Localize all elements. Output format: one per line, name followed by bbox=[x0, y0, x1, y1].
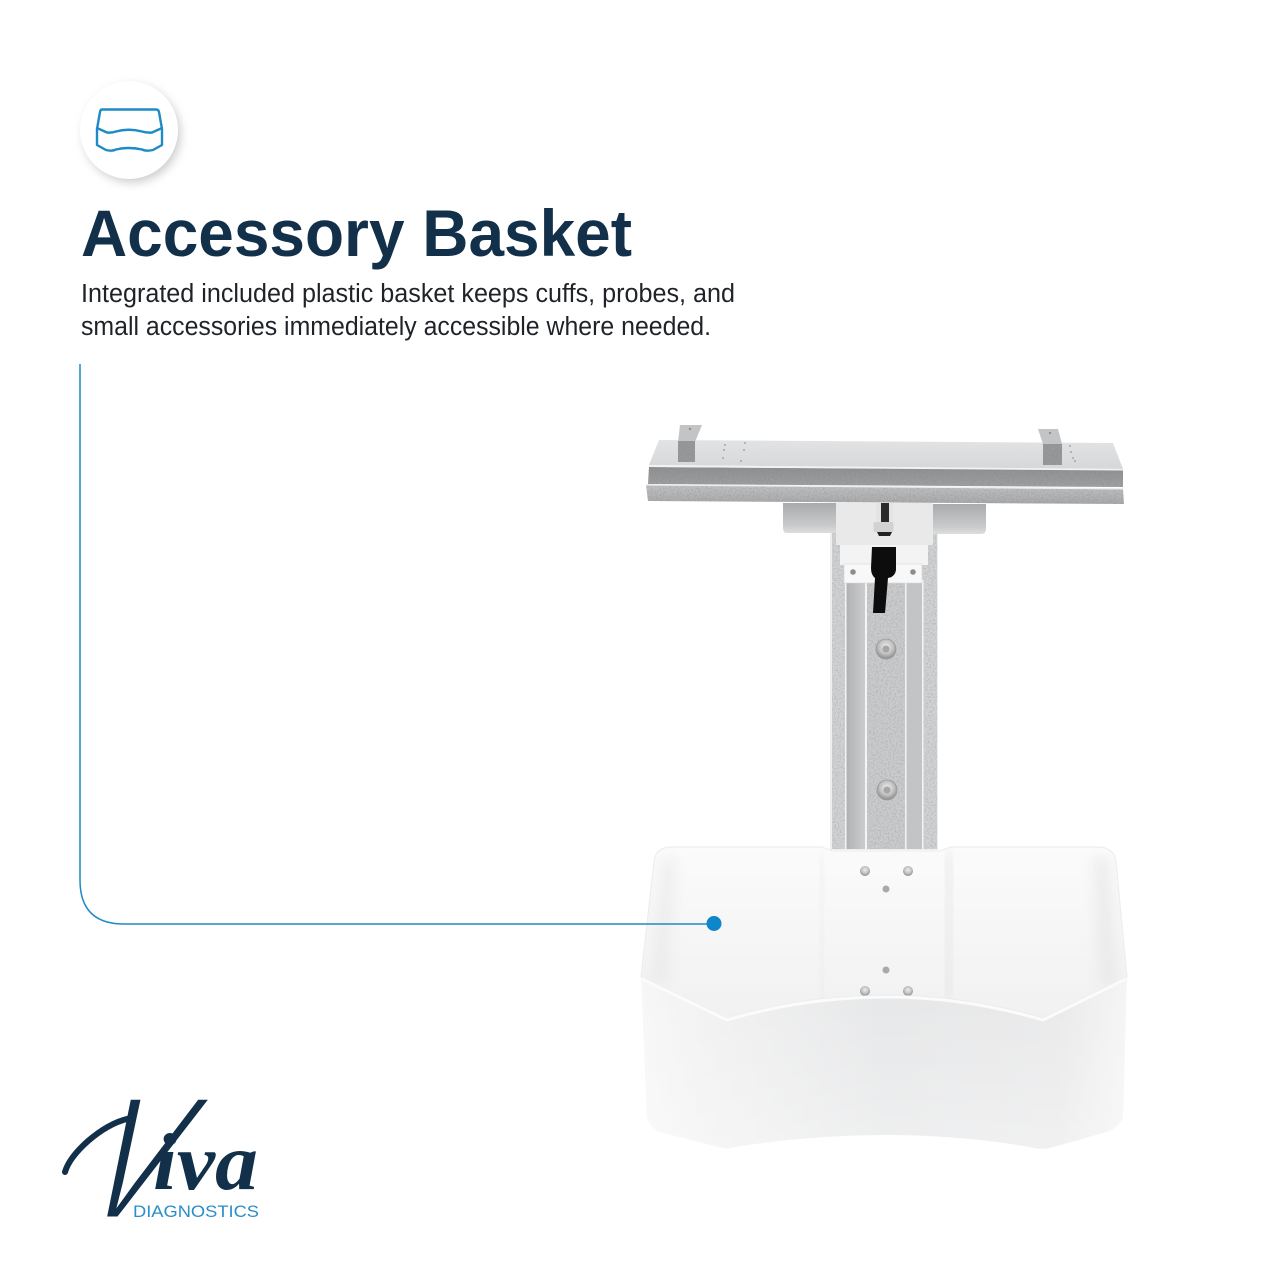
infographic canvas bbox=[62, 81, 1128, 1217]
description text bbox=[81, 280, 735, 341]
upper screw bbox=[876, 639, 896, 659]
basket screws bbox=[860, 866, 913, 996]
tray side brackets bbox=[783, 503, 986, 534]
tray front bands bbox=[646, 465, 1124, 504]
tray mounting holes bbox=[722, 442, 1076, 462]
description text: small accessories immediately accessible where needed. bbox=[81, 313, 711, 341]
clamp block bbox=[836, 503, 933, 583]
icon: basket badge bbox=[80, 81, 180, 182]
basket front wall bbox=[641, 977, 1127, 1149]
left post bbox=[678, 425, 702, 462]
knob bbox=[871, 503, 896, 613]
description text: Integrated included plastic basket keeps cuffs, probes, and bbox=[81, 280, 735, 308]
product: mounting tray bbox=[646, 425, 1124, 613]
product: white accessory basket bbox=[641, 847, 1127, 1149]
interior shading bbox=[650, 852, 1118, 1002]
product: mounting column bbox=[830, 530, 938, 850]
basket rim highlight bbox=[642, 979, 1126, 1020]
callout leader line bbox=[80, 364, 722, 931]
basket front fade bbox=[641, 977, 1127, 1149]
mounting plate bbox=[844, 564, 922, 583]
tray top surface bbox=[649, 440, 1123, 469]
logo: Viva Diagnostics bbox=[53, 1062, 259, 1256]
callout dot bbox=[706, 916, 722, 931]
lower screw bbox=[877, 780, 897, 800]
logo wordmark: iva bbox=[153, 1119, 258, 1207]
logo wordmark: V bbox=[53, 1062, 228, 1256]
right post bbox=[1038, 429, 1062, 465]
logo flourish bbox=[65, 1118, 131, 1172]
title: Accessory Basket bbox=[81, 196, 632, 270]
basket interior bbox=[641, 847, 1127, 1018]
logo tagline: DIAGNOSTICS bbox=[133, 1202, 259, 1221]
